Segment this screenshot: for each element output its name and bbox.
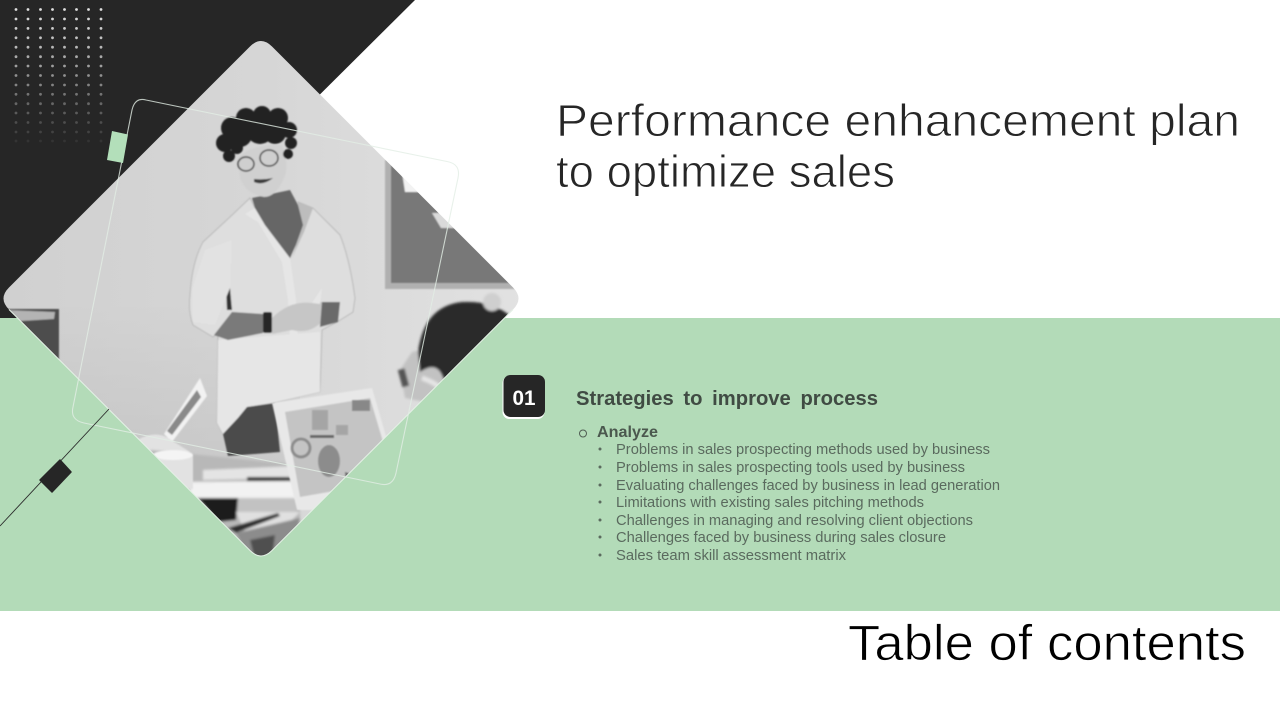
turtleneck <box>252 190 303 258</box>
green band <box>0 318 1280 611</box>
icon: dark tag <box>40 460 71 492</box>
shelf at left <box>8 308 60 360</box>
connector line with dark tag <box>0 409 109 526</box>
diamond photo: presenter in meeting room <box>0 30 530 570</box>
contents list <box>580 424 1000 564</box>
hair <box>216 106 297 162</box>
diamond lower outline <box>9 310 513 556</box>
title: Performance enhancement plan <box>556 95 1240 146</box>
glasses <box>238 150 278 171</box>
desk and paperwork <box>150 449 302 556</box>
laptop <box>272 388 390 510</box>
presenter <box>189 106 355 456</box>
page heading: Table of contents: Table of contents <box>848 615 1246 671</box>
seated man <box>398 293 515 405</box>
section heading: Strategies to improve process <box>576 388 878 410</box>
icon: green tab <box>107 131 128 163</box>
bullet items: Challenges faced by business during sales closure <box>616 530 946 546</box>
photo wall background <box>4 41 518 522</box>
bullet items: Challenges in managing and resolving client objections <box>616 513 973 529</box>
bullet items <box>598 442 1000 564</box>
number badge <box>502 375 545 419</box>
bullet items: Sales team skill assessment matrix <box>616 548 847 564</box>
title: to optimize sales <box>556 146 895 197</box>
arm and hands <box>214 312 263 340</box>
coffee mug <box>153 450 193 489</box>
title <box>556 95 1240 197</box>
tablet <box>140 378 208 452</box>
sub-heading: Analyze: Analyze <box>597 424 658 441</box>
trousers <box>223 403 280 456</box>
face <box>238 145 287 197</box>
shirt <box>188 198 356 392</box>
bullet items: Evaluating challenges faced by business in lead generation <box>616 478 1000 494</box>
bullet items: Problems in sales prospecting tools used by business <box>616 460 965 476</box>
dark corner panel <box>0 0 415 318</box>
number badge: 01 <box>512 387 536 410</box>
cork board <box>385 160 530 289</box>
dot grid pattern <box>15 8 102 142</box>
bullet items: Limitations with existing sales pitching methods <box>616 495 924 511</box>
rotated outline frame <box>72 99 459 485</box>
bullet items: Problems in sales prospecting methods used by business <box>616 442 990 458</box>
